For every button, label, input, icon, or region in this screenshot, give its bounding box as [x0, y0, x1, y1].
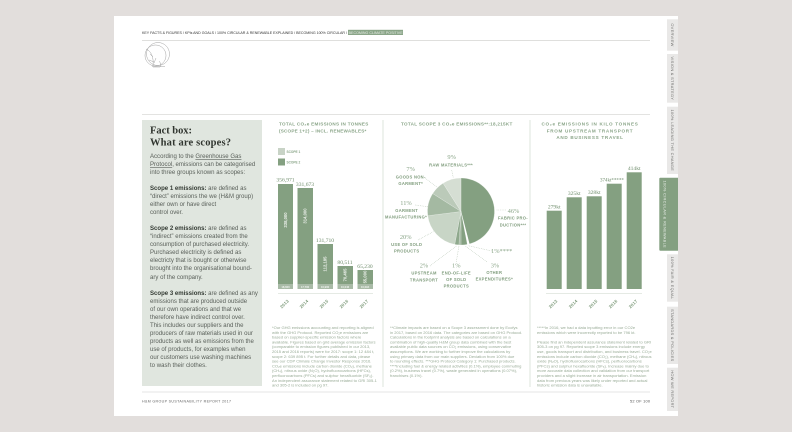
footnote: pie chart: combination of high-quality H&M group data combined with the best — [390, 339, 512, 344]
chart heading: total CO2e scope 1+2: (SCOPE 1+2) – INCL. RENEWABLES* — [279, 129, 367, 134]
bar values above: 328kt — [588, 190, 601, 196]
footer left: H&M GROUP SUSTAINABILITY REPORT 2017 — [142, 400, 231, 404]
scope 1 text: “direct” emissions the we (H&M group) — [150, 194, 253, 200]
tab: 100% fair and equal — [667, 254, 678, 302]
tab: how we report: HOW WE REPORT — [670, 370, 675, 409]
footnote: chart 3: oxide (N₂O), hydrofluorocarbons (HFCs), perfluorocarbons — [537, 359, 642, 364]
bar values above: 331,673 — [296, 182, 314, 188]
year labels: 2013 — [279, 298, 290, 309]
footnote: chart 3: data from previous years was likely under reported and actual — [537, 378, 648, 383]
chart heading: upstream transport and business travel — [541, 122, 639, 140]
tab: 100% leading the change — [667, 107, 678, 174]
pie label: other expenditures: EXPENDITURES* — [476, 277, 513, 282]
scope 3 text: of our own operations and that we — [150, 307, 242, 313]
pie label: garment manufacturing: GARMENT — [395, 208, 418, 213]
bar values above: 131,710 — [316, 238, 334, 244]
bar values above: 65,230 — [357, 264, 373, 270]
tab: vision and strategy — [667, 54, 678, 103]
scope 2 values: 338,000 — [283, 212, 288, 228]
fact box intro: into three groups known as scopes: — [150, 170, 245, 176]
pie label: end-of-life: END-OF-LIFE — [442, 270, 471, 275]
chart heading: upstream transport and business travel: FROM UPSTREAM TRANSPORT — [547, 128, 633, 133]
year labels — [279, 298, 370, 309]
pie label: raw materials: RAW MATERIALS*** — [429, 162, 473, 167]
panel: fact box — [142, 120, 262, 386]
pie label: goods non-garment: GOODS NON- — [396, 174, 426, 180]
pie label: goods non-garment: GARMENT* — [398, 181, 423, 186]
footnote: pie chart: Calculations in the footprint analysis are based on calculations on a — [390, 335, 511, 340]
year labels: 2015 — [588, 298, 599, 309]
pie label: fabric production: DUCTION*** — [500, 223, 526, 228]
pie label: end-of-life: 1% — [452, 262, 461, 270]
year labels: 2016 — [608, 298, 619, 309]
bar values above: 374kt***** — [600, 178, 624, 183]
tab: how we report — [667, 368, 678, 411]
scope 3 text: This includes our suppliers and the — [150, 323, 244, 329]
tab: standards and policies — [667, 307, 678, 364]
pie label: goods non-garment: 7% — [406, 166, 416, 173]
bar values above: 80,511 — [337, 260, 353, 266]
bar chart: scope 1+2 emissions — [276, 178, 373, 309]
bar values above: 279kt — [548, 204, 561, 210]
tab: overview — [667, 19, 678, 51]
pie label: fourth-star one percent: 1%**** — [491, 248, 512, 255]
footnote: pie chart: using primary data from our main suppliers. Deviation from 100% due — [390, 354, 515, 359]
footnote: chart 3: (PFCs) and sulphur hexafluoride (SF₆). Increase mainly due to — [537, 363, 650, 368]
scope 1 values: 10,094 — [361, 285, 370, 289]
scope 3 text: therefore have indirect control over. — [150, 315, 245, 321]
footnote: pie chart: franchises (0.1%). — [390, 373, 423, 378]
footnote: chart 1 — [272, 325, 378, 388]
scope 3 text: to wash their clothes. — [150, 363, 207, 369]
footnote: chart 1: and 305-2 is included on pg 97. — [272, 383, 328, 388]
pie leader lines — [415, 170, 507, 266]
page number: 52 OF 100 — [630, 398, 651, 404]
footnote: chart 3 — [537, 325, 652, 388]
legend: SCOPE 2 — [286, 160, 301, 164]
year labels: 2013 — [548, 298, 559, 309]
navigation tabs — [659, 19, 678, 411]
scope 1 values — [281, 285, 370, 289]
footnote: chart 1: with the GHG Protocol. Reported CO₂e emissions are — [272, 330, 369, 335]
footnote: chart 3: use, goods transport and distribution, and business travel. CO₂e — [537, 349, 652, 354]
scope 3 text: products as well as emissions from the — [150, 339, 254, 345]
tab: 100% fair and equal: 100% FAIR & EQUAL — [670, 257, 675, 300]
scope 2 text: “indirect” emissions created from the — [150, 234, 248, 240]
footnote: pie chart: **Climate impacts are based on a Scope 3 assessment done by Ecofys — [390, 325, 518, 330]
footnote: pie chart: to rounding effects. ***GHG Protocol Category 1: Purchased products. — [390, 359, 516, 364]
tab: vision and strategy: VISION & STRATEGY — [670, 56, 675, 100]
bar values above: 356,971 — [276, 178, 295, 184]
scope 1 values: 17,700 — [301, 285, 310, 289]
fact box intro: According to the Greenhouse Gas — [150, 154, 241, 160]
year labels: 2014 — [299, 298, 310, 309]
pie label: other expenditures — [476, 262, 513, 282]
footnote: chart 1: (comparable to emission figures published in our 2013, — [272, 344, 370, 349]
footnote: chart 3: emissions include carbon dioxide (CO₂), methane (CH₄), nitrous — [537, 354, 652, 359]
pie label: end-of-life: OF SOLD — [446, 277, 466, 282]
scope 1 text — [150, 186, 253, 216]
scope 2 text: ary of the company. — [150, 275, 203, 281]
pie label: upstream transport — [410, 262, 438, 282]
footnote: pie chart: available public data sources on CO₂ emissions, using conservative — [390, 344, 512, 349]
scope 2 text — [150, 226, 252, 281]
scope 2 values: 70,465 — [343, 268, 348, 281]
pie label: other expenditures: 3% — [491, 262, 500, 270]
bar values above — [548, 166, 641, 210]
pie label: goods non-garment — [396, 166, 426, 186]
footnote: chart 1: scope 2: 639 895 t. For further details and data, please — [272, 354, 371, 359]
pie label: use of sold products: 20% — [400, 234, 412, 241]
scope 3 text: use of products, for examples when — [150, 347, 245, 353]
scope 2 values: 112,185 — [323, 256, 328, 271]
breadcrumb navigation — [142, 30, 403, 35]
footnote: pie chart: in 2017, based on 2016 data. The categories are based on GHG Protocol. — [390, 330, 522, 335]
chart heading: upstream transport and business travel: AND BUSINESS TRAVEL — [556, 135, 624, 140]
year labels: 2017 — [359, 298, 370, 309]
fact box intro — [150, 154, 255, 176]
footnote: chart 3: emissions which were incorrectly reported to be 796 kt. — [537, 330, 636, 335]
tab: standards and policies: STANDARDS & POLICIES — [670, 309, 675, 362]
footnote: chart 1: An independent assurance statement related to GRI 305-1 — [272, 378, 378, 383]
tab: 100% circular and renewable (active): 100% CIRCULAR & RENEWABLE — [662, 180, 668, 248]
chart heading: total scope 3: TOTAL SCOPE 3 CO₂e EMISSIONS**:18,215KT — [401, 122, 513, 127]
footnote: chart 1: perfluorocarbons (PFCs) and sulphur hexafluoride (SF₆). — [272, 373, 374, 378]
pie label: garment manufacturing: 11% — [400, 200, 412, 207]
legend: SCOPE 1 — [286, 150, 301, 154]
pie label: use of sold products: PRODUCTS — [394, 249, 419, 254]
footnote: chart 3: Please find an independent assurance statement related to GRI — [537, 339, 651, 344]
footnote: pie chart — [390, 325, 522, 378]
footnote: chart 1: (CH₄), nitrous oxide (N₂O), hydrofluorocarbons (HFCs), — [272, 368, 371, 373]
icon: leaf in circle — [145, 42, 170, 67]
footnote: chart 1: 2015 and 2016 reports) were for 2017: scope 1: 12 484 t, — [272, 349, 374, 354]
footnote: chart 3: historic emission data is unavailable. — [537, 383, 603, 388]
scope 2 text: Scope 2 emissions: are defined as — [150, 226, 246, 232]
scope 1 text: either own or have direct — [150, 202, 217, 208]
pie label: upstream transport: 2% — [420, 262, 429, 270]
year labels: 2016 — [339, 298, 350, 309]
bar values above: 325kt — [568, 191, 581, 197]
pie label: end-of-life — [442, 262, 471, 289]
year labels: 2017 — [628, 298, 639, 309]
footnote: chart 1: available. Figures based on grid average emission factors — [272, 339, 375, 344]
chart heading: total CO2e scope 1+2: TOTAL CO₂e EMISSIONS IN TONNES — [279, 122, 369, 127]
scope 2 text: brought into the organisational bound- — [150, 266, 252, 272]
pie label: use of sold products — [391, 234, 422, 254]
pie label: raw materials — [429, 154, 473, 167]
scope 3 text: emissions that are produced outside — [150, 299, 248, 305]
pie label: upstream transport: UPSTREAM — [411, 270, 437, 275]
scope 2 text: Purchased electricity is defined as — [150, 250, 241, 256]
scope 1 values: 18,600 — [281, 285, 290, 289]
year labels — [548, 298, 639, 309]
pie label: use of sold products: USE OF SOLD — [391, 242, 422, 247]
year labels: 2014 — [568, 298, 579, 309]
pie label: fabric production — [498, 208, 528, 228]
tab: 100% leading the change: 100% LEADING THE CHANGE — [670, 110, 675, 171]
tab: overview: OVERVIEW — [670, 23, 675, 47]
footnote: chart 3: more accurate data collection and validation from our transport — [537, 368, 650, 373]
pie label: garment manufacturing: MANUFACTURING* — [385, 215, 427, 220]
scope 1 values: 16,900 — [321, 285, 330, 289]
footnote: pie chart: (0.2%), business travel (0.7%), waste generated in operations (0.07%), — [390, 368, 517, 373]
footnote: chart 3: 305-3 on pg 97. Reported scope 3 emissions include energy — [537, 344, 646, 349]
tab: 100% circular and renewable (active) — [659, 178, 678, 251]
scope 1 text: Scope 1 emissions: are defined as — [150, 186, 246, 192]
footnote: chart 1: CO₂e emissions include carbon dioxide (CO₂), methane — [272, 363, 373, 368]
scope 2 text: electricty that is bought or otherwise — [150, 258, 247, 264]
footnote: pie chart: ****Including fuel & energy related activities (0.1%), employee commuting — [390, 363, 521, 368]
bar values above — [276, 178, 373, 270]
breadcrumb navigation: BECOMING CLIMATE POSITIVE — [349, 31, 403, 35]
fact box heading: What are scopes? — [150, 138, 231, 148]
scope 3 text: Scope 3 emissions: are defined as any — [150, 291, 259, 297]
pie label: fabric production: FABRIC PRO- — [498, 216, 528, 221]
pie label: upstream transport: TRANSPORT — [410, 277, 438, 282]
pie label: end-of-life: PRODUCTS — [444, 284, 469, 289]
pie label: raw materials: 9% — [447, 154, 457, 161]
breadcrumb navigation: KEY FACTS & FIGURES / KPIs AND GOALS / 100% CIRCULAR & RENEWABLE EXPLAINED / BECOMING 100% CIRCULAR / — [142, 31, 347, 35]
fact box heading — [150, 126, 231, 148]
footnote: chart 1: see our CDP Climate Change Investor Response 2016. — [272, 359, 371, 364]
scope 3 text: producers of raw materials used in our — [150, 331, 253, 337]
scope 3 text: our customers use washing machines — [150, 355, 251, 361]
scope 2 values: 55,000 — [363, 270, 368, 283]
footnote: chart 3: providers and a slight increase in air transportation. Emission — [537, 373, 646, 378]
year labels: 2015 — [319, 298, 330, 309]
scope 2 values — [283, 208, 368, 283]
pie label: garment manufacturing — [385, 200, 427, 220]
bar chart: transport emissions — [546, 166, 642, 309]
footnote: chart 1: *Our GHG emissions accounting and reporting is aligned — [272, 325, 374, 330]
pie chart: scope 3 categories — [385, 154, 528, 289]
fact box intro: Protocol, emissions can be categorised — [150, 162, 255, 168]
scope 3 text — [150, 291, 259, 369]
pie label: fabric production: 46% — [508, 208, 520, 215]
legend — [278, 148, 301, 166]
chart heading: total CO2e scope 1+2 — [279, 122, 369, 134]
scope 2 text: consumption of purchased electricity. — [150, 242, 249, 248]
scope 2 values: 314,000 — [303, 208, 308, 224]
chart heading: upstream transport and business travel: CO₂e EMISSIONS IN KILO TONNES — [541, 122, 639, 127]
fact box heading: Fact box: — [150, 126, 192, 136]
footnote: pie chart: assumptions. We are working to further improve the calculations by — [390, 349, 511, 354]
footnote: chart 1: based on supplier-specific emission factors where — [272, 335, 362, 340]
footnote: chart 3: *****In 2016, we had a data inputting error in our CO2e — [537, 325, 636, 330]
scope 1 text: control over. — [150, 210, 183, 216]
pie label: other expenditures: OTHER — [486, 270, 502, 275]
scope 1 values: 10,046 — [341, 285, 350, 289]
bar values above: 414kt — [628, 166, 641, 172]
